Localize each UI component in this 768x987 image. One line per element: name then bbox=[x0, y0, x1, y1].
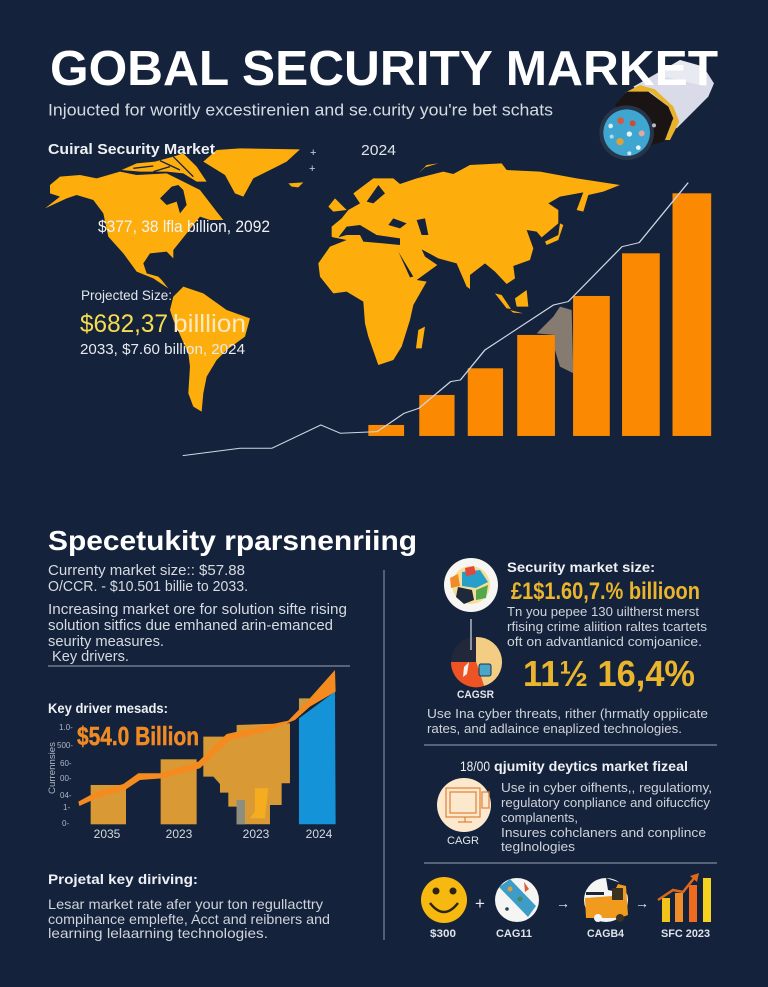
chart: key drivers: 04- bbox=[60, 791, 72, 800]
heading: quality analytics: 18/00 bbox=[460, 759, 490, 774]
arrow: → bbox=[635, 895, 649, 911]
text block: cyber threats: rates, and adlaince enaplized technologies. bbox=[427, 721, 682, 736]
text block: market size: Key drivers. bbox=[52, 648, 129, 665]
text block: market size: solution sitfics due emhaned arin-emanced bbox=[48, 617, 333, 634]
icon: globe badge bbox=[444, 558, 498, 612]
label: CAGR: CAGR bbox=[447, 835, 479, 847]
map label: current size: $377, 38 lfla billion, 2092 bbox=[98, 217, 270, 236]
year label: 2024 bbox=[361, 143, 396, 159]
text block: regulatory compliance: Insures cohclaners and conplince bbox=[501, 825, 706, 840]
heading: security market size: Security market size: bbox=[507, 559, 655, 575]
icon: smiley bbox=[421, 877, 467, 923]
chart: key drivers: 1- bbox=[63, 803, 70, 812]
icon: monitor badge bbox=[437, 778, 491, 832]
chart: key drivers: 2023 bbox=[243, 827, 270, 841]
text block: market size: Increasing market ore for solution sifte rising bbox=[48, 601, 347, 618]
text block: regulatory compliance: Use in cyber oifhents,, regulatiomy, bbox=[501, 780, 712, 795]
projected key drivers text: compihance emplefte, Acct and reibners and bbox=[48, 911, 330, 927]
map label: projected size: 2033, $7.60 billion, 2024 bbox=[80, 342, 245, 358]
label: CAGSR: CAGSR bbox=[457, 689, 494, 701]
icon: bus badge bbox=[584, 878, 628, 922]
plus marks: + bbox=[310, 147, 316, 159]
text block: market size: seurity measures. bbox=[48, 633, 164, 650]
projected key drivers text: Lesar market rate afer your ton regullacttry bbox=[48, 896, 323, 912]
icon: growth bars bbox=[658, 873, 711, 922]
Europe, Asia and Africa bbox=[318, 163, 620, 373]
projected key drivers heading: Projetal key diriving: bbox=[48, 871, 198, 887]
trend line bbox=[183, 183, 688, 456]
text block: market size notes: oft on advantlanicd comjoanice. bbox=[507, 634, 702, 649]
projected key drivers text: learning lelaarning technologies. bbox=[48, 925, 268, 941]
chart: key drivers: 00- bbox=[60, 774, 72, 783]
label: CAGB4: CAGB4 bbox=[587, 928, 625, 940]
chart heading: Key driver mesads: bbox=[48, 700, 168, 716]
value: market size: £1$1.60,7.% billioon bbox=[511, 578, 700, 605]
text block: regulatory compliance bbox=[501, 780, 712, 854]
text block: cyber threats bbox=[427, 706, 708, 736]
map label: projected size: $682,37 bbox=[80, 310, 168, 338]
section heading: Specetukity rparsnenriing bbox=[48, 525, 417, 556]
chart: key drivers: Currennsies bbox=[47, 741, 57, 794]
subtitle: Injoucted for woritly excestirenien and se.curity you're bet schats bbox=[48, 100, 553, 120]
icon: CAGR pie chart bbox=[451, 619, 502, 687]
chart: key drivers: 1.0- bbox=[59, 723, 73, 732]
value: growth rates: 11½ 16,4% bbox=[523, 653, 695, 694]
plus sign: + bbox=[475, 894, 485, 913]
plus marks bbox=[309, 147, 316, 175]
icon: security camera capsule bbox=[599, 60, 714, 160]
projected key drivers text bbox=[48, 896, 330, 941]
world map bbox=[45, 148, 620, 412]
text block: regulatory compliance: tegInologies bbox=[501, 839, 576, 854]
chart: key drivers: 2023 bbox=[166, 827, 193, 841]
label: $300: $300 bbox=[430, 928, 456, 940]
text block: market size: Currenty market size:: $57.88 bbox=[48, 562, 245, 579]
label: CAG11: CAG11 bbox=[496, 928, 532, 940]
chart: key drivers: 2035 bbox=[94, 827, 121, 841]
text block: cyber threats: Use Ina cyber threats, rither (hrmatly oppiicate bbox=[427, 706, 708, 721]
text block: market size notes bbox=[507, 604, 708, 649]
bar chart: market growth bbox=[183, 183, 711, 456]
text block: market size notes: Tn you pepee 130 uiltherst merst bbox=[507, 604, 699, 619]
chart value callout: $54.0 Billion bbox=[77, 721, 199, 751]
heading: quality analytics: qjumity deytics market fizeal bbox=[494, 759, 688, 774]
map heading: Cuiral Security Market bbox=[48, 142, 215, 158]
map label: projected size bbox=[80, 287, 246, 358]
map label: projected size: Projected Size: bbox=[81, 287, 172, 303]
Americas and Greenland bbox=[45, 148, 303, 412]
plus marks: + bbox=[309, 163, 315, 175]
chart: key drivers: 2024 bbox=[306, 827, 333, 841]
text block: regulatory compliance: complanents, bbox=[501, 810, 578, 825]
label: SFC 2023: SFC 2023 bbox=[661, 928, 710, 940]
chart: key drivers: 0- bbox=[62, 819, 69, 828]
chart: key drivers bbox=[47, 670, 336, 841]
chart: key drivers: 60- bbox=[60, 759, 72, 768]
text block: market size notes: rfising crime aliition raltes tcartets bbox=[507, 619, 708, 634]
map label: projected size: billlion bbox=[173, 310, 246, 338]
chart: key drivers: 500- bbox=[57, 741, 73, 750]
text block: market size bbox=[48, 562, 347, 665]
arrow: → bbox=[556, 895, 570, 911]
text block: market size: O/CCR. - $10.501 billie to 2033. bbox=[48, 578, 248, 595]
text block: regulatory compliance: regulatory conpliance and oifuccficy bbox=[501, 795, 711, 810]
title: GOBAL SECURITY MARKET bbox=[50, 42, 718, 96]
icon: map badge bbox=[495, 878, 539, 922]
